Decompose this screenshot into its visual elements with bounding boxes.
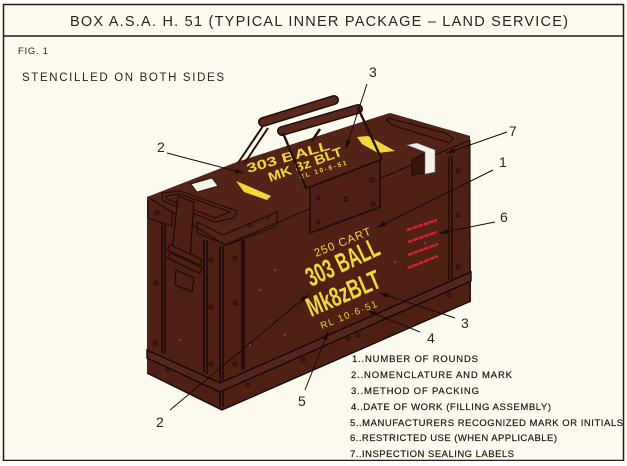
figure label: FIG. 1 bbox=[18, 46, 48, 57]
corner strapping lines bbox=[162, 156, 452, 407]
legend list: 4..DATE OF WORK (FILLING ASSEMBLY) bbox=[351, 402, 551, 413]
legend list bbox=[350, 354, 623, 460]
box long side face bbox=[222, 145, 471, 410]
side stencil text: Mk8zBLT bbox=[302, 264, 385, 323]
top stencil text: 303 BALL bbox=[245, 138, 332, 176]
rivets bbox=[153, 169, 460, 387]
side stencil text: 250 CART bbox=[313, 226, 373, 260]
legend list: 2..NOMENCLATURE AND MARK bbox=[351, 370, 513, 381]
leader lines and callout numbers bbox=[156, 64, 517, 430]
box silhouette bbox=[147, 113, 471, 410]
carrying handle bbox=[238, 100, 382, 188]
legend list: 1..NUMBER OF ROUNDS bbox=[352, 354, 478, 365]
lid outline and latch plates bbox=[148, 118, 470, 300]
legend list: 6..RESTRICTED USE (WHEN APPLICABLE) bbox=[350, 433, 557, 444]
inspection sealing label bbox=[407, 143, 435, 175]
stencil note: STENCILLED ON BOTH SIDES bbox=[22, 72, 224, 84]
speckles bbox=[179, 242, 426, 346]
restricted use red bars bbox=[407, 220, 438, 268]
legend list: 5..MANUFACTURERS RECOGNIZED MARK OR INITIALS bbox=[350, 418, 623, 429]
legend list: 3..METHOD OF PACKING bbox=[351, 386, 479, 397]
leader lines and callout numbers: 7 bbox=[509, 123, 517, 139]
top stencil text bbox=[245, 138, 348, 185]
bottom rim bbox=[147, 272, 471, 392]
leader lines and callout numbers: 2 bbox=[156, 414, 164, 430]
leader lines and callout numbers: 3 bbox=[461, 315, 469, 331]
leader lines and callout numbers: 3 bbox=[369, 64, 377, 80]
leader lines and callout numbers: 5 bbox=[298, 393, 306, 409]
top stencil text: RL 10-6-51 bbox=[299, 160, 348, 181]
leader lines and callout numbers: 2 bbox=[157, 139, 165, 155]
ammunition box illustration bbox=[147, 100, 471, 410]
side stencil text: RL 10·6·51 bbox=[319, 299, 379, 332]
side stencil text: 303 BALL bbox=[301, 232, 384, 292]
latch on end face bbox=[167, 196, 203, 292]
side stencil text bbox=[301, 226, 385, 332]
top stencil text: MK 8z BLT bbox=[266, 144, 344, 185]
leader lines and callout numbers: 1 bbox=[499, 154, 507, 170]
legend list: 7..INSPECTION SEALING LABELS bbox=[350, 449, 514, 460]
top bullet symbols bbox=[236, 181, 271, 200]
white inspection label on top bbox=[191, 178, 218, 192]
title: BOX A.S.A. H. 51 (TYPICAL INNER PACKAGE – LAND SERVICE) bbox=[70, 14, 568, 30]
leader lines and callout numbers: 4 bbox=[427, 330, 435, 346]
leader lines and callout numbers: 6 bbox=[500, 209, 508, 225]
box top lid face bbox=[148, 113, 470, 245]
handle plate bbox=[310, 160, 380, 233]
